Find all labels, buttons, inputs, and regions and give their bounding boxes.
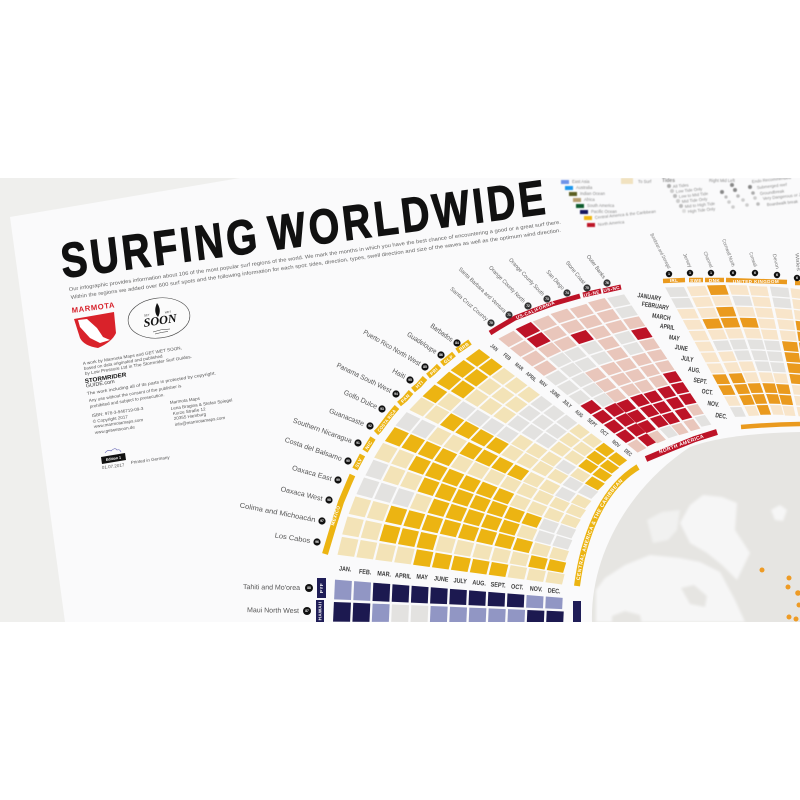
copyright text block (87, 371, 216, 409)
spot number markers: Central America: 85 (423, 365, 427, 369)
inner band: North America: NORTH AMERICA (658, 434, 705, 456)
spot labels: Central America: Barbados (429, 323, 454, 344)
month labels: Pacific divider: FEB. (359, 569, 372, 577)
band labels: Central America countries: NIC (364, 440, 373, 450)
spot number markers: North America: 71 (507, 313, 511, 317)
spot number markers: Central America: 86 (439, 353, 443, 357)
column: Cornwall North (728, 285, 788, 415)
spot labels: Europe: Cornwall North (720, 238, 736, 268)
spot number markers: North America: 73 (545, 297, 549, 301)
legend item: Africa: Africa (584, 197, 595, 202)
outer band: French Polynesia: PYF (319, 583, 324, 593)
legend: direction and type icons: Submerged reef (757, 182, 788, 190)
column: Panama South West (409, 397, 601, 502)
month labels: North America and Europe divider: DEC. (715, 413, 728, 421)
spot number markers: Pacific (303, 584, 313, 615)
intro text: Our infographic provides information about 106 of the most popular surf regions of the world. We mark the months in which you have the best chance of encountering a good or a great surf there. (68, 220, 561, 293)
logo: Get Wet Soon: WET (165, 310, 172, 314)
month labels: North America and Europe divider (637, 293, 728, 421)
spot labels: Pacific (243, 584, 300, 615)
month labels: North America and Europe divider: JUNE (674, 344, 688, 353)
copyright text block: prohibited and subject to prosecution. (90, 392, 165, 409)
month labels: North America and Europe divider: FEBRUARY (641, 301, 669, 312)
logo: Get Wet Soon (126, 294, 192, 342)
spot number markers: Europe: 1 (668, 272, 670, 276)
spot labels: Europe (648, 232, 800, 272)
spot labels: Europe: Channel (702, 251, 714, 269)
spot number markers: Europe: 1 (689, 271, 691, 275)
month labels: Central America sector: NOV (610, 439, 622, 450)
spot labels: Central America: Puerto Rico North West (362, 329, 422, 368)
band labels: Europe countries: SWE (690, 278, 702, 283)
edition badge: Printed in Germany (131, 455, 171, 465)
band labels: Central America countries: BRB (458, 341, 470, 352)
spot labels: Central America: Los Cabos (274, 532, 311, 545)
legend: direction and type icons: Endo Recommended (752, 175, 792, 184)
spot number markers: Europe: 6 (732, 271, 734, 275)
spot number markers: Europe (666, 270, 800, 281)
legend: tides: Low to Mid Tide (679, 191, 709, 199)
column: San Diego (570, 304, 692, 436)
credits text block (83, 345, 192, 376)
address text block: Marmota Maps (170, 396, 201, 405)
column: Colima and Michoacan (342, 516, 567, 577)
legend item: Central America: Central America & the Caribbean (595, 209, 657, 220)
column: Jersey (687, 286, 763, 416)
spot number markers: Central America (313, 339, 461, 546)
month labels: Central America sector (488, 343, 634, 459)
month labels: North America and Europe divider: APRIL (659, 323, 675, 332)
column: Barbados (466, 349, 630, 468)
column: Haiti (423, 385, 607, 493)
spot number markers: North America: 74 (565, 291, 569, 295)
spot labels: Europe: Devon (771, 253, 780, 270)
month labels: North America and Europe divider: NOV. (707, 401, 720, 409)
month labels: Central America sector: MAY (537, 379, 549, 390)
map disc (592, 432, 800, 622)
edition badge: 01.07.2017 (102, 462, 125, 470)
month labels: Central America sector: AUG (573, 409, 585, 420)
ISBN text block: ISBN: 978-3-946719-09-3 (92, 406, 144, 418)
poster sheet (10, 178, 800, 622)
band labels: North America regions: US-NE (583, 289, 600, 298)
spot number markers: Central America: 92 (368, 424, 372, 428)
spot labels: Central America: Southern Nicaragua (292, 418, 353, 445)
spot number markers: North America: 75 (585, 286, 589, 290)
month labels: Pacific divider: SEPT. (490, 582, 506, 590)
column: Maui North West (333, 602, 564, 627)
inner band: Europe (741, 424, 800, 427)
legend: tides (662, 178, 716, 214)
column: Santa Cruz County (498, 331, 650, 454)
legend: surf quality swatch: To Surf (638, 179, 652, 184)
spot labels: North America: Orange County South (507, 257, 545, 297)
map land: Greenland (680, 495, 750, 580)
legend: surf quality swatch (621, 178, 652, 184)
column: Cornwall (749, 286, 799, 416)
inner band: Pacific (573, 601, 581, 622)
legend item: Pacific Ocean: Pacific Ocean (591, 209, 618, 214)
month labels: Pacific divider: APRIL (395, 573, 412, 581)
legend: tides: High Tide Only (688, 206, 716, 214)
map: surf spot dots (760, 568, 800, 622)
month labels: Central America sector: JULY (561, 398, 573, 410)
spot number markers: Europe: 6 (796, 276, 798, 280)
spot labels: Central America: Guanacaste (328, 408, 365, 428)
logo: Stormrider Guide: STORMRIDER (84, 371, 127, 385)
month labels: Central America sector: MAR (513, 362, 525, 373)
month labels: North America and Europe divider: AUG. (688, 367, 701, 375)
outer band: Hawaii: HAWAII (318, 602, 322, 620)
edition badge (101, 449, 171, 470)
logo: Marmota Maps: MARMOTA (71, 300, 115, 315)
band labels: North America regions: US-CALIFORNIA (515, 300, 556, 320)
column: Tahiti and Mo'orea (334, 580, 563, 613)
column: Orange County North (533, 315, 669, 445)
column: Oaxaca East (356, 478, 574, 553)
column: Stone Coast (588, 298, 704, 432)
ISBN text block: © Copyright 2017 (92, 413, 129, 424)
inner band: Central America and Caribbean: CENTRAL AMERICA & THE CARIBBEAN (576, 478, 622, 580)
band labels: Central America countries: PRI (429, 367, 439, 376)
band labels: Central America countries: COSTA RICA (376, 408, 397, 433)
credits text block: based on data originated and published (84, 353, 163, 371)
intro text: Within the regions we added over 600 surf spots and the following information for each spot: tides, direction, types, swell direction and size of the waves as well as the optimum wind direction. (70, 228, 561, 301)
spot number markers: Central America: 99 (336, 478, 340, 482)
column: Southern Nicaragua (374, 443, 583, 531)
band labels: Central America countries: PAN (400, 393, 411, 404)
spot labels: Central America: Guadeloupe (405, 331, 438, 356)
spot number markers: Europe: 1 (710, 271, 712, 275)
column: Los Cabos (337, 537, 566, 588)
map land: Arctic islands (647, 510, 680, 543)
month labels: North America and Europe divider: JULY (681, 356, 694, 364)
column: Guanacaste (385, 427, 588, 521)
spot number markers: Central America: 84 (455, 341, 459, 345)
sector: Europe grid (665, 285, 800, 419)
inner band: North America (646, 432, 717, 459)
spot number markers: North America: 70 (489, 321, 493, 325)
spot number markers: Central America: 91 (356, 441, 360, 445)
month labels: North America and Europe divider: SEPT. (693, 377, 708, 386)
photo backdrop (0, 178, 800, 622)
spot labels: North America: Santa Barbara and Ventura (457, 267, 507, 315)
column: Costa del Balsamo (365, 460, 578, 542)
copyright text block: Any use without the consent of the publisher is (89, 383, 182, 403)
column: Santa Barbara and Ventura (516, 322, 659, 448)
band labels: Central America countries (330, 341, 470, 526)
spot labels: North America (448, 254, 606, 323)
month labels: Central America sector: OCT (598, 428, 609, 438)
inner band: Central America and Caribbean (574, 464, 640, 586)
legend item: East Asia: East Asia (572, 179, 590, 184)
month labels: North America and Europe divider: JANUARY (637, 293, 662, 303)
month labels: Pacific divider: JUNE (434, 576, 449, 584)
spot labels: Europe: Cornwall (747, 252, 758, 268)
month labels: North America and Europe divider: MARCH (652, 313, 671, 323)
month labels: Pacific divider: JAN. (339, 566, 352, 574)
logo: Get Wet Soon: SOON (143, 311, 179, 330)
legend item: North America: North America (598, 219, 625, 227)
band labels: Central America countries: SLV (354, 457, 363, 468)
legend: direction and type icons (709, 175, 800, 209)
band labels: Europe countries (670, 278, 779, 284)
legend: regions (561, 179, 657, 227)
outer bands: North America regions (490, 287, 621, 333)
spot labels: North America: Outer Banks (585, 254, 606, 280)
address text block: Lena Bragina & Stefan Spiegel (171, 398, 233, 411)
band labels: North America regions (515, 285, 621, 320)
spot labels: Pacific: Tahiti and Mo'orea (243, 584, 300, 592)
ISBN text block (92, 406, 144, 435)
spot number markers: North America: 72 (526, 304, 530, 308)
month labels: Pacific divider: AUG. (472, 580, 486, 588)
address text block: Kurze Straße 12 (173, 406, 206, 416)
outer bands: Central America countries (325, 342, 470, 554)
band labels: North America regions: US-NC (603, 285, 621, 293)
column: Orange County South (550, 309, 682, 439)
legend: tides: Mid Tide Only (682, 196, 708, 204)
month labels: Pacific divider: MAY (416, 574, 428, 582)
legend: tides: Mid to High Tide (685, 201, 716, 209)
spot number markers: Central America: 90 (346, 459, 350, 463)
spot labels: Central America: Panama South West (335, 362, 392, 395)
spot number markers: Pacific: 87 (305, 609, 309, 613)
band labels: Europe countries: IRL (670, 278, 678, 283)
outer band: French Polynesia (317, 578, 326, 598)
column: Channel (707, 285, 775, 415)
month labels: Central America sector: FEB (501, 352, 512, 363)
spot labels: North America: San Diego (544, 269, 565, 291)
map land: gray region (612, 611, 642, 624)
credits text block: A work by Marmota Maps and GET WET SOON, (83, 345, 182, 366)
credits text block: by Low Pressure Ltd in The Stormrider Surf Guides. (85, 354, 192, 376)
legend: tides: Low Tide Only (676, 186, 703, 194)
spot labels: Central America: Oaxaca West (280, 486, 323, 503)
spot number markers: Central America: 95 (408, 378, 412, 382)
legend item: South America: South America (587, 203, 615, 208)
map land: Canada (596, 555, 745, 622)
month labels: Central America sector: JUNE (548, 388, 562, 401)
spot number markers: Central America: 98 (327, 498, 331, 502)
spot number markers: North America: 76 (605, 281, 609, 285)
map land masses (596, 495, 787, 624)
column: Devon (770, 287, 800, 417)
month labels: Pacific divider (339, 566, 561, 596)
spot labels: North America: Orange County North (487, 265, 526, 304)
spot labels: Central America: Costa del Balsamo (284, 437, 343, 463)
outer bands: Europe countries (663, 280, 800, 283)
band labels: Central America countries: GLP (443, 354, 454, 365)
map land: Iceland (771, 505, 787, 521)
legend: direction and type icons: Right Mid Left (709, 178, 736, 183)
month labels: Central America sector: JAN (488, 343, 499, 354)
address text block: info@marmotamaps.com (175, 415, 226, 427)
spot labels: North America: Stone Coast (564, 260, 586, 286)
logo: Stormrider Guide: GUIDE.com (86, 379, 116, 389)
spot labels: Europe: Bundoran and Donegal (648, 232, 672, 270)
logo: Marmota Maps (71, 300, 116, 348)
month labels: North America and Europe divider: OCT. (701, 389, 714, 397)
legend: direction and type icons: Groundbreak (760, 188, 785, 196)
spot labels: Central America (239, 323, 454, 545)
legend item: Indian Ocean: Indian Ocean (580, 191, 606, 196)
band labels: Central America countries: MEXICO (330, 505, 341, 526)
spot labels: Europe: Jersey (681, 253, 693, 269)
spot number markers: Europe: 6 (776, 273, 778, 277)
month labels: Central America sector: APRIL (524, 371, 538, 384)
spot labels: North America: Santa Cruz County (448, 286, 489, 323)
logo: Get Wet Soon: GET (144, 313, 150, 317)
edition badge: Edition 1 (106, 456, 121, 462)
month labels: Pacific divider: MAR. (377, 571, 392, 579)
spot labels: Central America: Golfo Dulce (342, 389, 378, 411)
spot number markers: Central America: 96 (315, 540, 319, 544)
address text block (170, 396, 233, 427)
column: Guadeloupe (451, 360, 622, 476)
band labels: Central America countries: HTI (415, 380, 424, 389)
month labels: Pacific divider: OCT. (511, 584, 524, 592)
map water: Hudson Bay (681, 585, 707, 607)
spot number markers: Europe: 6 (754, 271, 756, 275)
title: SURFING WORLDWIDE (58, 170, 551, 289)
column: Golfo Dulce (395, 412, 594, 512)
band labels: Europe countries: UNITED KINGDOM (733, 279, 779, 284)
month labels: Pacific divider: NOV. (529, 586, 543, 594)
column: Oaxaca West (349, 496, 570, 565)
spot number markers: Central America: 94 (394, 392, 398, 396)
spot number markers: Central America: 93 (380, 407, 384, 411)
month labels: Pacific divider: JULY (453, 578, 467, 586)
legend item: Australia: Australia (576, 185, 593, 190)
address text block: 20355 Hamburg (174, 412, 207, 421)
month labels: North America and Europe divider: MAY (668, 335, 680, 343)
legend: direction and type icons: Boardwalk break (767, 199, 799, 207)
sector: Pacific Ocean grid (333, 580, 564, 627)
spot number markers: Central America: 97 (320, 519, 324, 523)
column: Wales (790, 288, 800, 419)
spot labels: Central America: Colima and Michoacán (239, 502, 316, 524)
column: Puerto Rico North West (437, 372, 615, 484)
outer band: Hawaii (316, 600, 324, 622)
month labels: Central America sector: SEPT (586, 417, 598, 429)
legend: tides: All Tides (673, 182, 689, 189)
spot number markers: Pacific: 88 (307, 586, 311, 590)
column: Ireland (665, 287, 750, 417)
spot number markers: North America (487, 279, 611, 327)
ISBN text block: www.marmotamaps.com (94, 417, 144, 429)
ISBN text block: www.getwetsoon.de (95, 424, 136, 435)
spot labels: Central America: Haiti (391, 368, 407, 381)
legend: tides: Tides (662, 178, 675, 184)
sector: Central America and Caribbean grid (337, 349, 630, 588)
sector: North America grid (498, 294, 715, 454)
spot labels: Pacific: Maui North West (247, 607, 299, 615)
spot labels: Central America: Oaxaca East (291, 465, 332, 483)
band labels: Europe countries: DNK (709, 278, 720, 283)
month labels: Pacific divider: DEC. (547, 588, 561, 596)
column: Outer Banks (607, 294, 715, 427)
month labels: Central America sector: DEC (622, 448, 634, 459)
copyright text block: The work including all of its parts is protected by copyright. (87, 371, 216, 396)
